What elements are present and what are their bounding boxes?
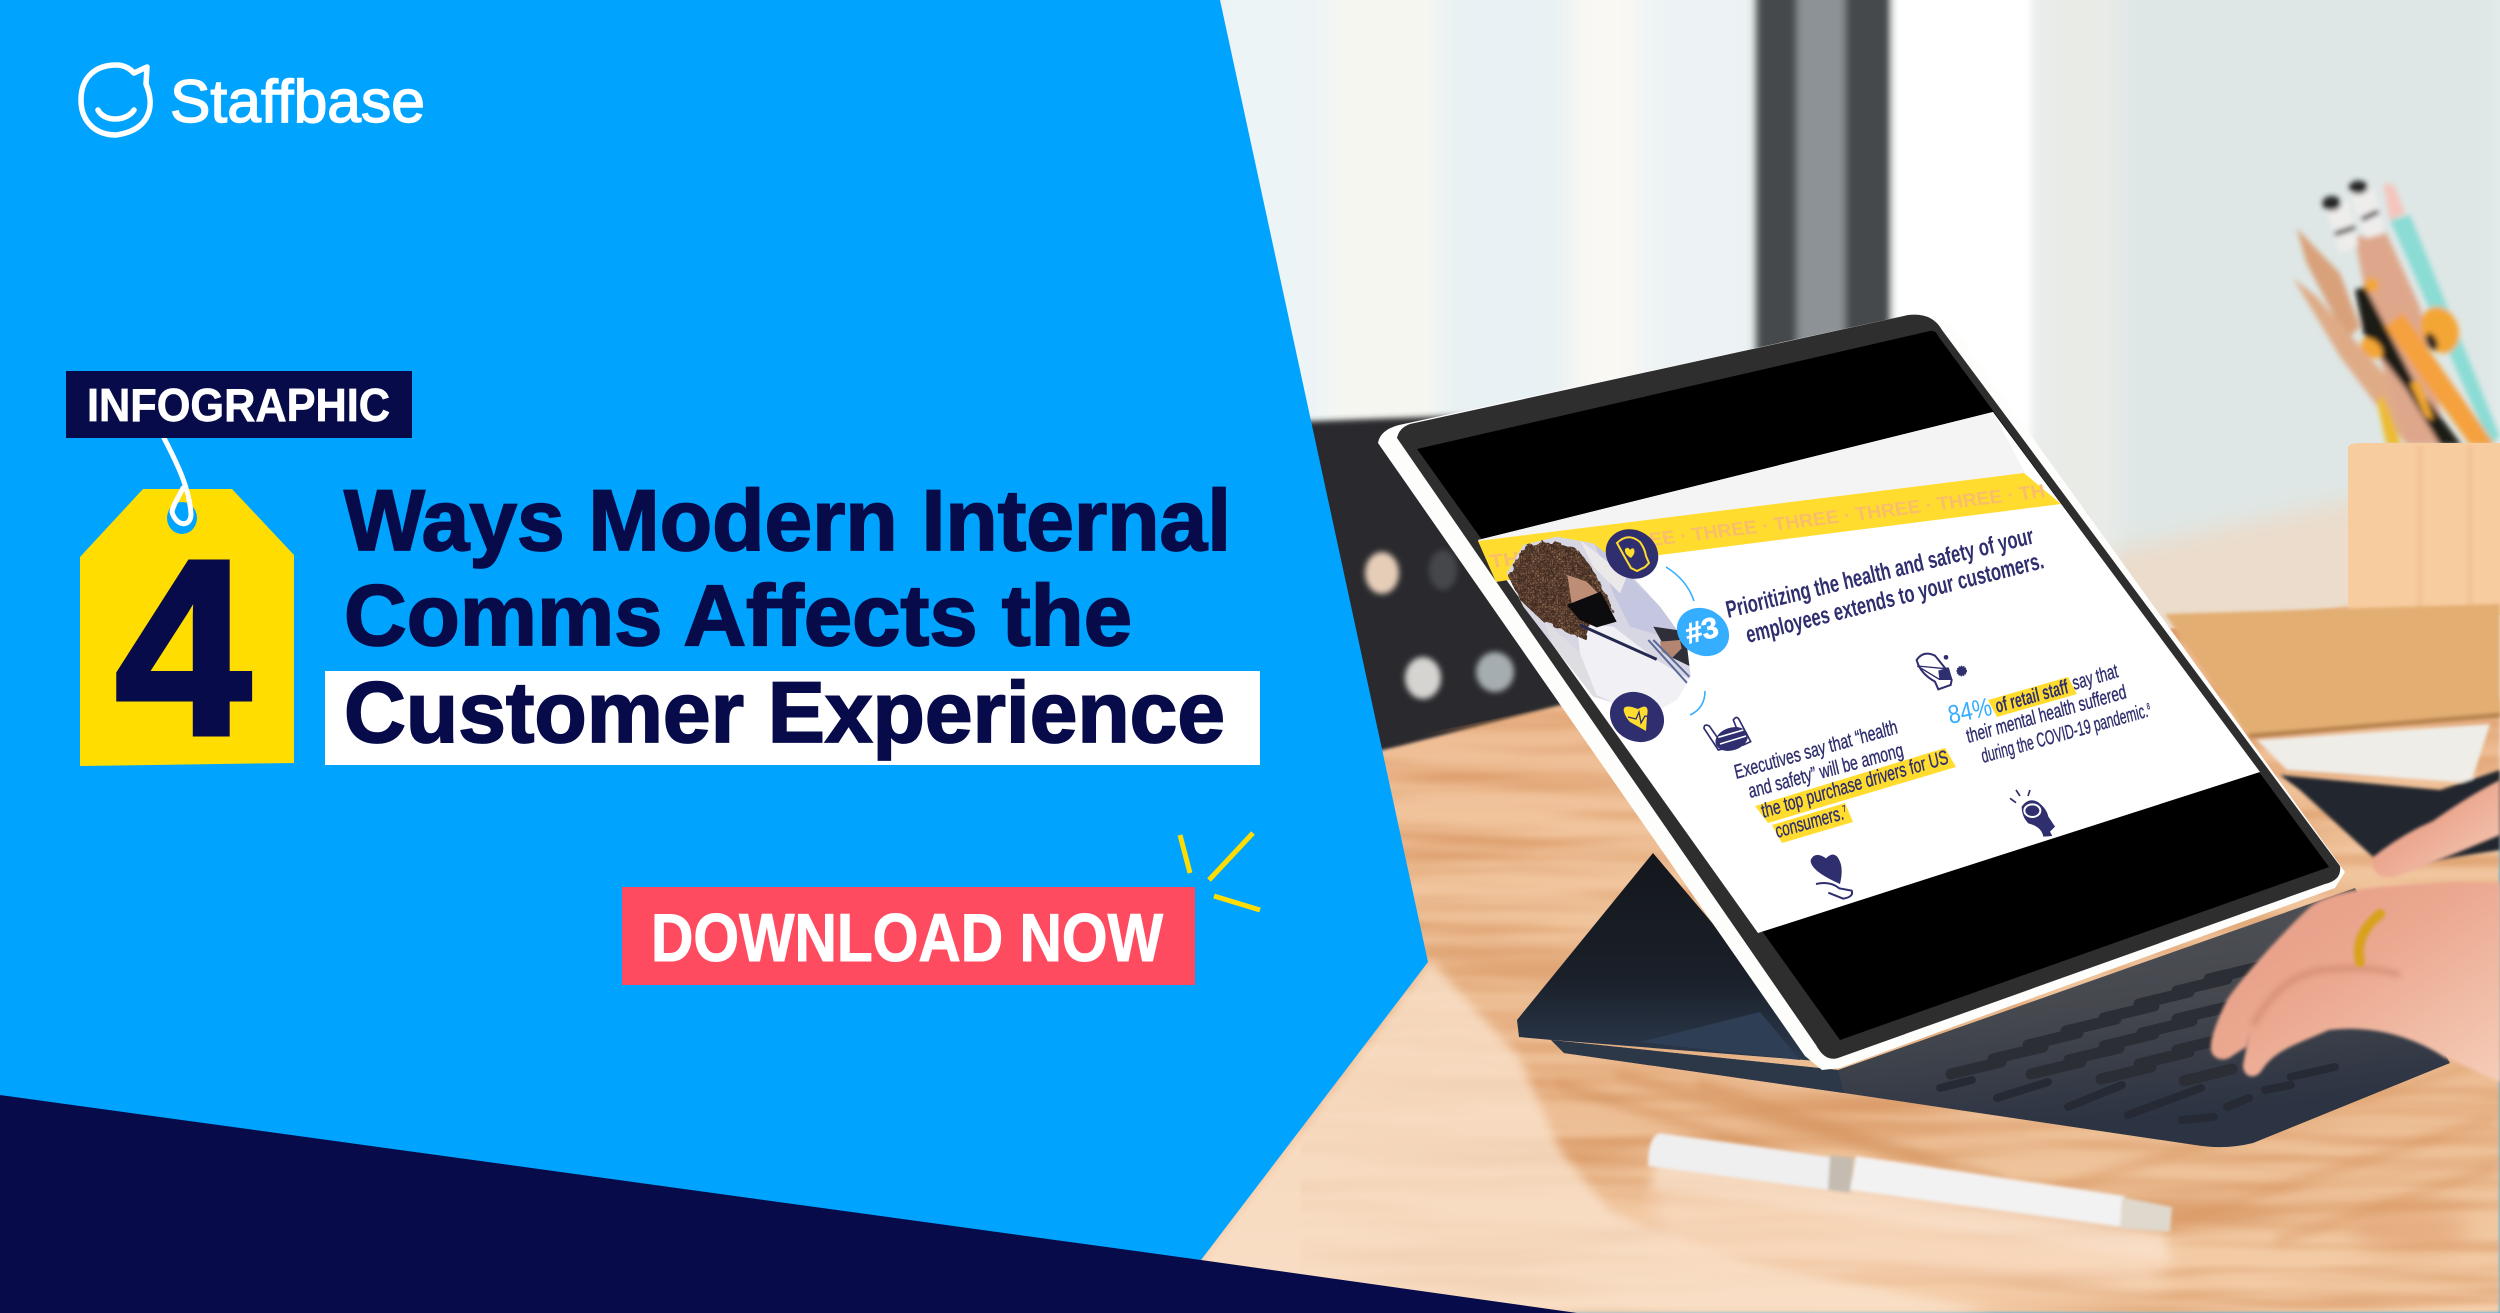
download button	[622, 887, 1195, 985]
white stylus on table	[1648, 1133, 2172, 1262]
right statistic: of retail staff	[1993, 676, 2071, 718]
hand and typing fingers	[2211, 882, 2500, 1082]
slide heading	[1723, 523, 2046, 649]
tablet white edge	[1378, 314, 2345, 1070]
icon: face mask	[1704, 717, 1751, 755]
icon: head with heart badge	[1597, 520, 1667, 588]
stacked notebooks	[2165, 604, 2500, 868]
price tag with number 4: 4	[115, 508, 251, 787]
price tag with number 4	[80, 489, 294, 787]
upper finger	[2372, 780, 2500, 877]
highlights	[1755, 748, 1956, 843]
slide background	[1478, 412, 2260, 933]
gold ring	[2359, 914, 2380, 962]
tag string	[164, 438, 191, 524]
title: Ways Modern Internal	[344, 473, 1231, 569]
right statistic: during the COVID-19 pandemic.	[1979, 670, 2257, 768]
tablet screen	[1417, 331, 2329, 1040]
highlight	[1988, 677, 2077, 717]
title highlight	[325, 671, 1260, 765]
portrait photo	[1507, 537, 1691, 711]
slide on screen	[1478, 412, 2260, 933]
decorative blue arcs	[1666, 567, 1705, 715]
pen cup and pencils	[2293, 181, 2500, 615]
icon: head with idea	[2010, 790, 2055, 837]
chair	[1290, 412, 1640, 760]
slide heading: employees extends to your customers.	[1743, 547, 2046, 649]
infographic label: INFOGRAPHIC	[87, 379, 390, 431]
right statistic: say that	[2070, 660, 2120, 695]
title	[325, 473, 1260, 765]
blue panel	[0, 0, 1428, 1260]
hand on keyboard	[2211, 780, 2500, 1082]
tablet stand	[1517, 853, 1830, 1062]
navy bottom wedge	[0, 1095, 1577, 1313]
tablet	[1378, 314, 2345, 1070]
Staffbase logo: Staffbase	[170, 68, 425, 135]
yellow band: TH	[1488, 549, 1522, 573]
spark lines	[1180, 833, 1260, 910]
left statistic: consumers.	[1773, 794, 1877, 843]
icon: masked head and virus	[1917, 654, 1966, 689]
icon: heart in hand	[1811, 855, 1852, 899]
wooden cup	[2348, 443, 2500, 615]
right statistic: 8	[2146, 701, 2151, 712]
icon: heartbeat badge	[1601, 682, 1673, 752]
left statistic	[1704, 716, 1956, 843]
yellow band	[1478, 473, 2061, 582]
tag hole	[167, 502, 197, 534]
keys	[1951, 967, 2259, 1081]
keyboard cover	[1551, 888, 2450, 1147]
#3 number badge	[1668, 599, 1738, 665]
slide heading: Prioritizing the health and safety of your	[1723, 523, 2036, 624]
download button: DOWNLOAD NOW	[651, 900, 1164, 976]
wooden table	[1200, 600, 2500, 1313]
title: Customer Experience	[344, 665, 1225, 761]
right statistic: their mental health suffered	[1964, 681, 2128, 748]
left statistic: Executives say that “health	[1732, 716, 1900, 784]
background: blurred window	[1200, 0, 2500, 800]
left statistic: and safety” will be among	[1746, 740, 1906, 803]
right statistic	[1917, 654, 2153, 768]
icon: smiling bubble	[81, 65, 150, 135]
tablet bezel	[1397, 315, 2340, 1059]
right statistic: 84%	[1945, 691, 1994, 730]
light reflection area	[1200, 960, 2000, 1313]
#3 number badge: #3	[1682, 611, 1722, 651]
photo: desk scene with tablet	[1200, 0, 2500, 1313]
title: Comms Affects the	[344, 568, 1132, 664]
far desk surface	[2030, 500, 2490, 640]
left statistic: the top purchase drivers for US	[1759, 747, 1950, 823]
finger crease	[2253, 968, 2400, 1025]
left statistic: 7	[1841, 803, 1847, 814]
yellow band: REE · THREE · THREE · THREE · THREE · TH	[1634, 481, 2047, 553]
